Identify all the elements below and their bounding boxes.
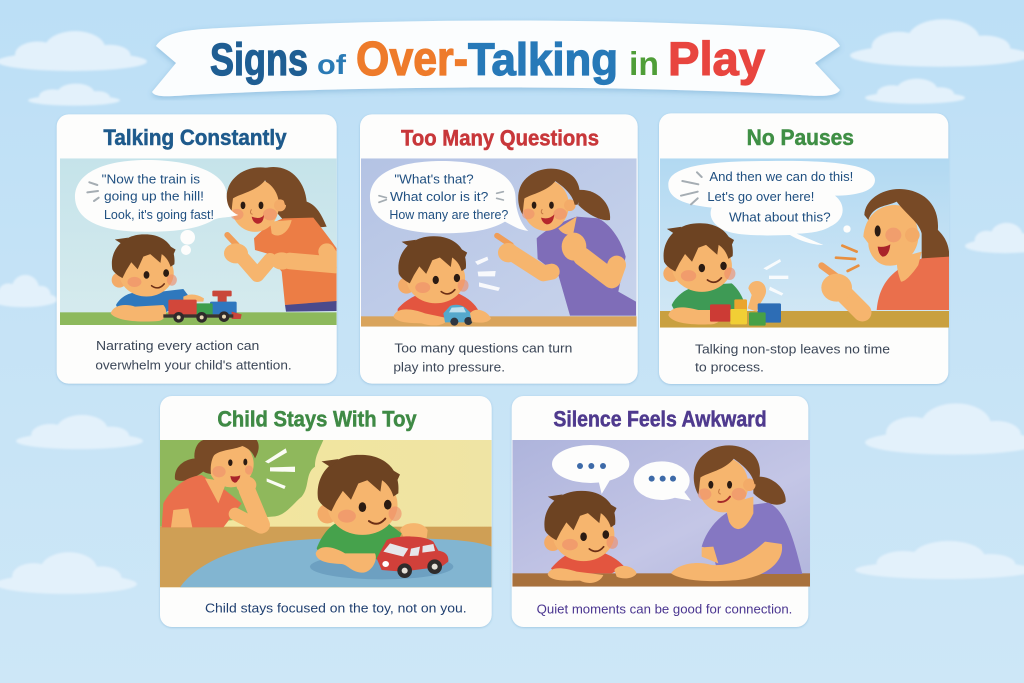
toy car xyxy=(443,305,473,326)
title text: Signs xyxy=(210,34,308,85)
speech bubble: "What's that? xyxy=(394,171,474,186)
illustration xyxy=(60,158,337,325)
empty speech bubbles xyxy=(552,445,691,501)
mom xyxy=(821,189,949,312)
caption: Child stays focused on the toy, not on you. xyxy=(205,601,467,616)
speech bubble: Look, it's going fast! xyxy=(104,207,214,222)
heading: Silence Feels Awkward xyxy=(553,407,767,432)
mom xyxy=(162,440,295,527)
caption: overwhelm your child's attention. xyxy=(95,357,292,372)
speech bubble xyxy=(75,160,238,255)
title text: Talking xyxy=(468,34,618,85)
caption: play into pressure. xyxy=(393,360,505,375)
title text: in xyxy=(629,45,659,82)
illustration xyxy=(361,158,637,327)
caption xyxy=(95,338,292,372)
speech bubble: "Now the train is xyxy=(102,171,201,186)
speech bubble xyxy=(668,161,875,245)
panel: too many questions xyxy=(360,114,638,384)
panel: no pauses xyxy=(659,113,949,384)
panel: silence feels awkward xyxy=(512,396,810,627)
heading: Too Many Questions xyxy=(401,126,599,151)
heading: No Pauses xyxy=(747,125,854,150)
title banner xyxy=(152,20,840,96)
caption: Too many questions can turn xyxy=(394,340,572,355)
boy with blocks xyxy=(663,223,788,326)
mom xyxy=(497,169,636,316)
panel: child stays with toy xyxy=(160,396,492,627)
caption: Narrating every action can xyxy=(96,338,259,353)
toy blocks xyxy=(710,299,781,326)
speech bubble: Let's go over here! xyxy=(707,189,814,204)
illustration xyxy=(160,440,492,587)
boy with red car xyxy=(310,455,453,579)
title text: Over- xyxy=(356,33,468,86)
speech bubble: How many are there? xyxy=(389,207,508,222)
boy with train xyxy=(111,234,242,323)
speech bubble: What about this? xyxy=(729,210,831,225)
speech bubble: And then we can do this! xyxy=(709,169,853,184)
speech bubble: going up the hill! xyxy=(104,189,204,204)
caption: to process. xyxy=(695,360,764,375)
title text xyxy=(210,32,765,86)
caption xyxy=(393,340,572,375)
boy xyxy=(544,491,637,583)
train toy xyxy=(163,291,242,323)
toy car xyxy=(377,536,448,578)
title text: Play xyxy=(668,32,765,85)
speech bubble xyxy=(370,161,528,233)
speech bubble: What color is it? xyxy=(390,189,488,204)
heading: Talking Constantly xyxy=(103,125,287,150)
heading: Child Stays With Toy xyxy=(217,407,417,432)
caption: Quiet moments can be good for connection. xyxy=(537,601,792,616)
panel: talking constantly xyxy=(57,114,337,384)
caption xyxy=(695,341,890,375)
boy with toy car xyxy=(393,236,500,326)
illustration xyxy=(660,158,949,328)
mom xyxy=(671,445,802,581)
mom xyxy=(224,167,337,312)
caption: Talking non-stop leaves no time xyxy=(695,341,890,356)
illustration xyxy=(512,440,810,587)
title text: of xyxy=(317,49,347,80)
